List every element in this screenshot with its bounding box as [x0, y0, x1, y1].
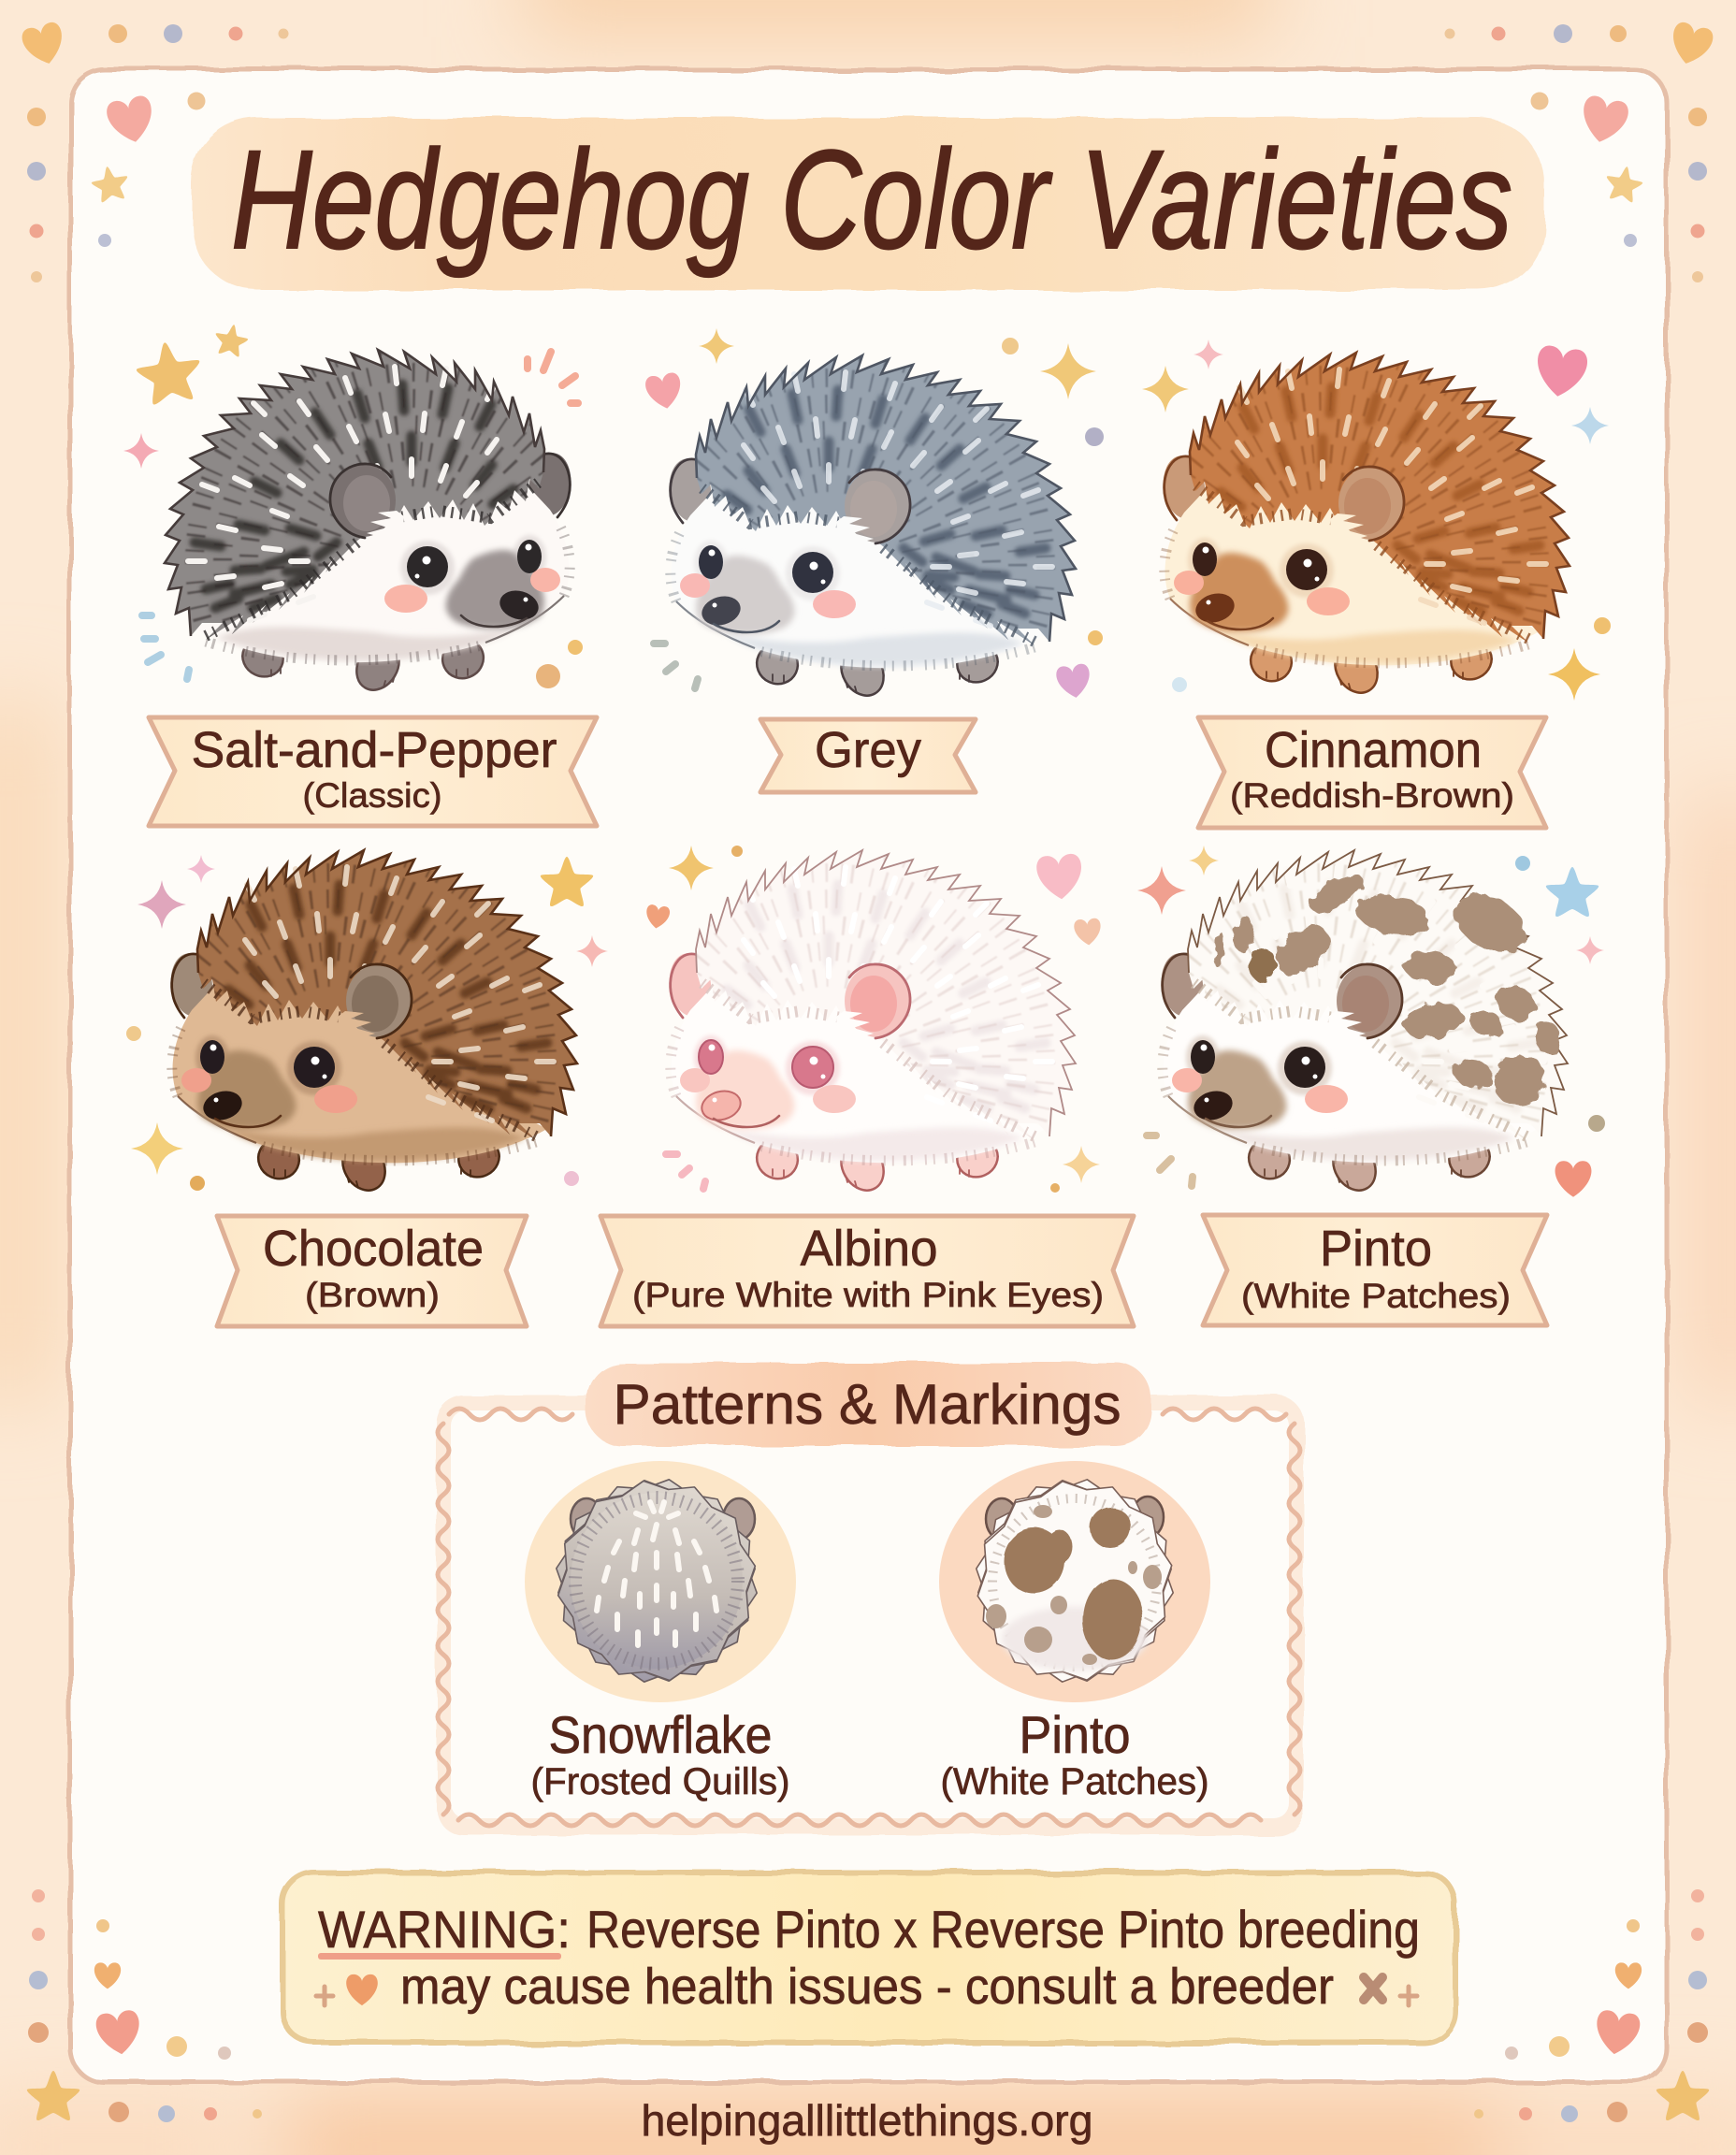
heading: Patterns & Markings: [614, 1373, 1121, 1436]
ribbon: pinto: (White Patches): [1241, 1277, 1511, 1315]
ribbon: grey: [760, 719, 976, 792]
label: snowflake: [531, 1705, 789, 1802]
warning text line 2: may cause health issues - consult a breeder: [400, 1959, 1334, 2015]
icon: plus left: [316, 1987, 333, 2005]
wavy border: [438, 1409, 1300, 1826]
label: snowflake: (Frosted Quills): [531, 1761, 789, 1802]
footer url: helpingalllittlethings.org: [642, 2096, 1092, 2145]
ribbon: albino: [600, 1216, 1134, 1326]
warning box: [282, 1873, 1455, 2043]
corner decorations: bottom: [27, 1889, 1709, 2122]
ribbon: salt-and-pepper: Salt-and-Pepper: [191, 722, 557, 778]
hedgehog: pinto: [1104, 845, 1568, 1279]
label: pinto pattern: (White Patches): [941, 1761, 1208, 1802]
hedgehog: chocolate: [113, 845, 577, 1279]
decorations: chocolate: [126, 855, 608, 1191]
ribbon: salt-and-pepper: (Classic): [303, 776, 441, 815]
heading pill: [586, 1363, 1151, 1446]
ribbon: pinto: [1203, 1215, 1547, 1325]
corner decorations: top: [20, 21, 1715, 282]
decorations: grey: [644, 328, 1104, 700]
decorations: albino: [644, 846, 1102, 1193]
label: snowflake: Snowflake: [548, 1705, 773, 1764]
icon: plus right: [1400, 1987, 1417, 2005]
pinto medallion: [939, 1451, 1210, 1711]
ribbon: chocolate: (Brown): [305, 1276, 440, 1314]
label: pinto pattern: Pinto: [1020, 1705, 1130, 1764]
ribbon: cinnamon: Cinnamon: [1265, 722, 1482, 778]
icon: heart: [346, 1974, 378, 2005]
decorations: salt-and-pepper: [123, 322, 583, 688]
warning text line 1: Reverse Pinto x Reverse Pinto breeding: [586, 1900, 1420, 1959]
hedgehog: salt-and-pepper: [165, 344, 629, 778]
panel: patterns and markings: [436, 1363, 1304, 1835]
icon: cross: [1364, 1977, 1382, 2000]
title banner: [192, 118, 1544, 290]
ribbon: salt-and-pepper: [149, 717, 597, 826]
ribbon: chocolate: Chocolate: [263, 1221, 484, 1277]
decorations: cinnamon: [1142, 340, 1611, 701]
ribbon: cinnamon: [1198, 717, 1546, 828]
ribbon: grey: Grey: [815, 722, 921, 778]
warning underline: [318, 1953, 561, 1960]
hedgehog: cinnamon: [1106, 347, 1570, 781]
ribbon: cinnamon: (Reddish-Brown): [1230, 776, 1514, 815]
ribbon: chocolate: [217, 1216, 527, 1326]
decorations: pinto: [1137, 846, 1605, 1197]
ribbon: albino: (Pure White with Pink Eyes): [632, 1276, 1104, 1314]
ribbon: albino: Albino: [801, 1221, 937, 1277]
hedgehog: albino: [612, 845, 1076, 1279]
warning text line 1: WARNING:: [318, 1900, 571, 1959]
hedgehog: grey: [612, 350, 1076, 784]
snowflake medallion: [525, 1450, 796, 1712]
label: pinto pattern: [941, 1705, 1208, 1802]
ribbon: pinto: Pinto: [1320, 1221, 1432, 1277]
